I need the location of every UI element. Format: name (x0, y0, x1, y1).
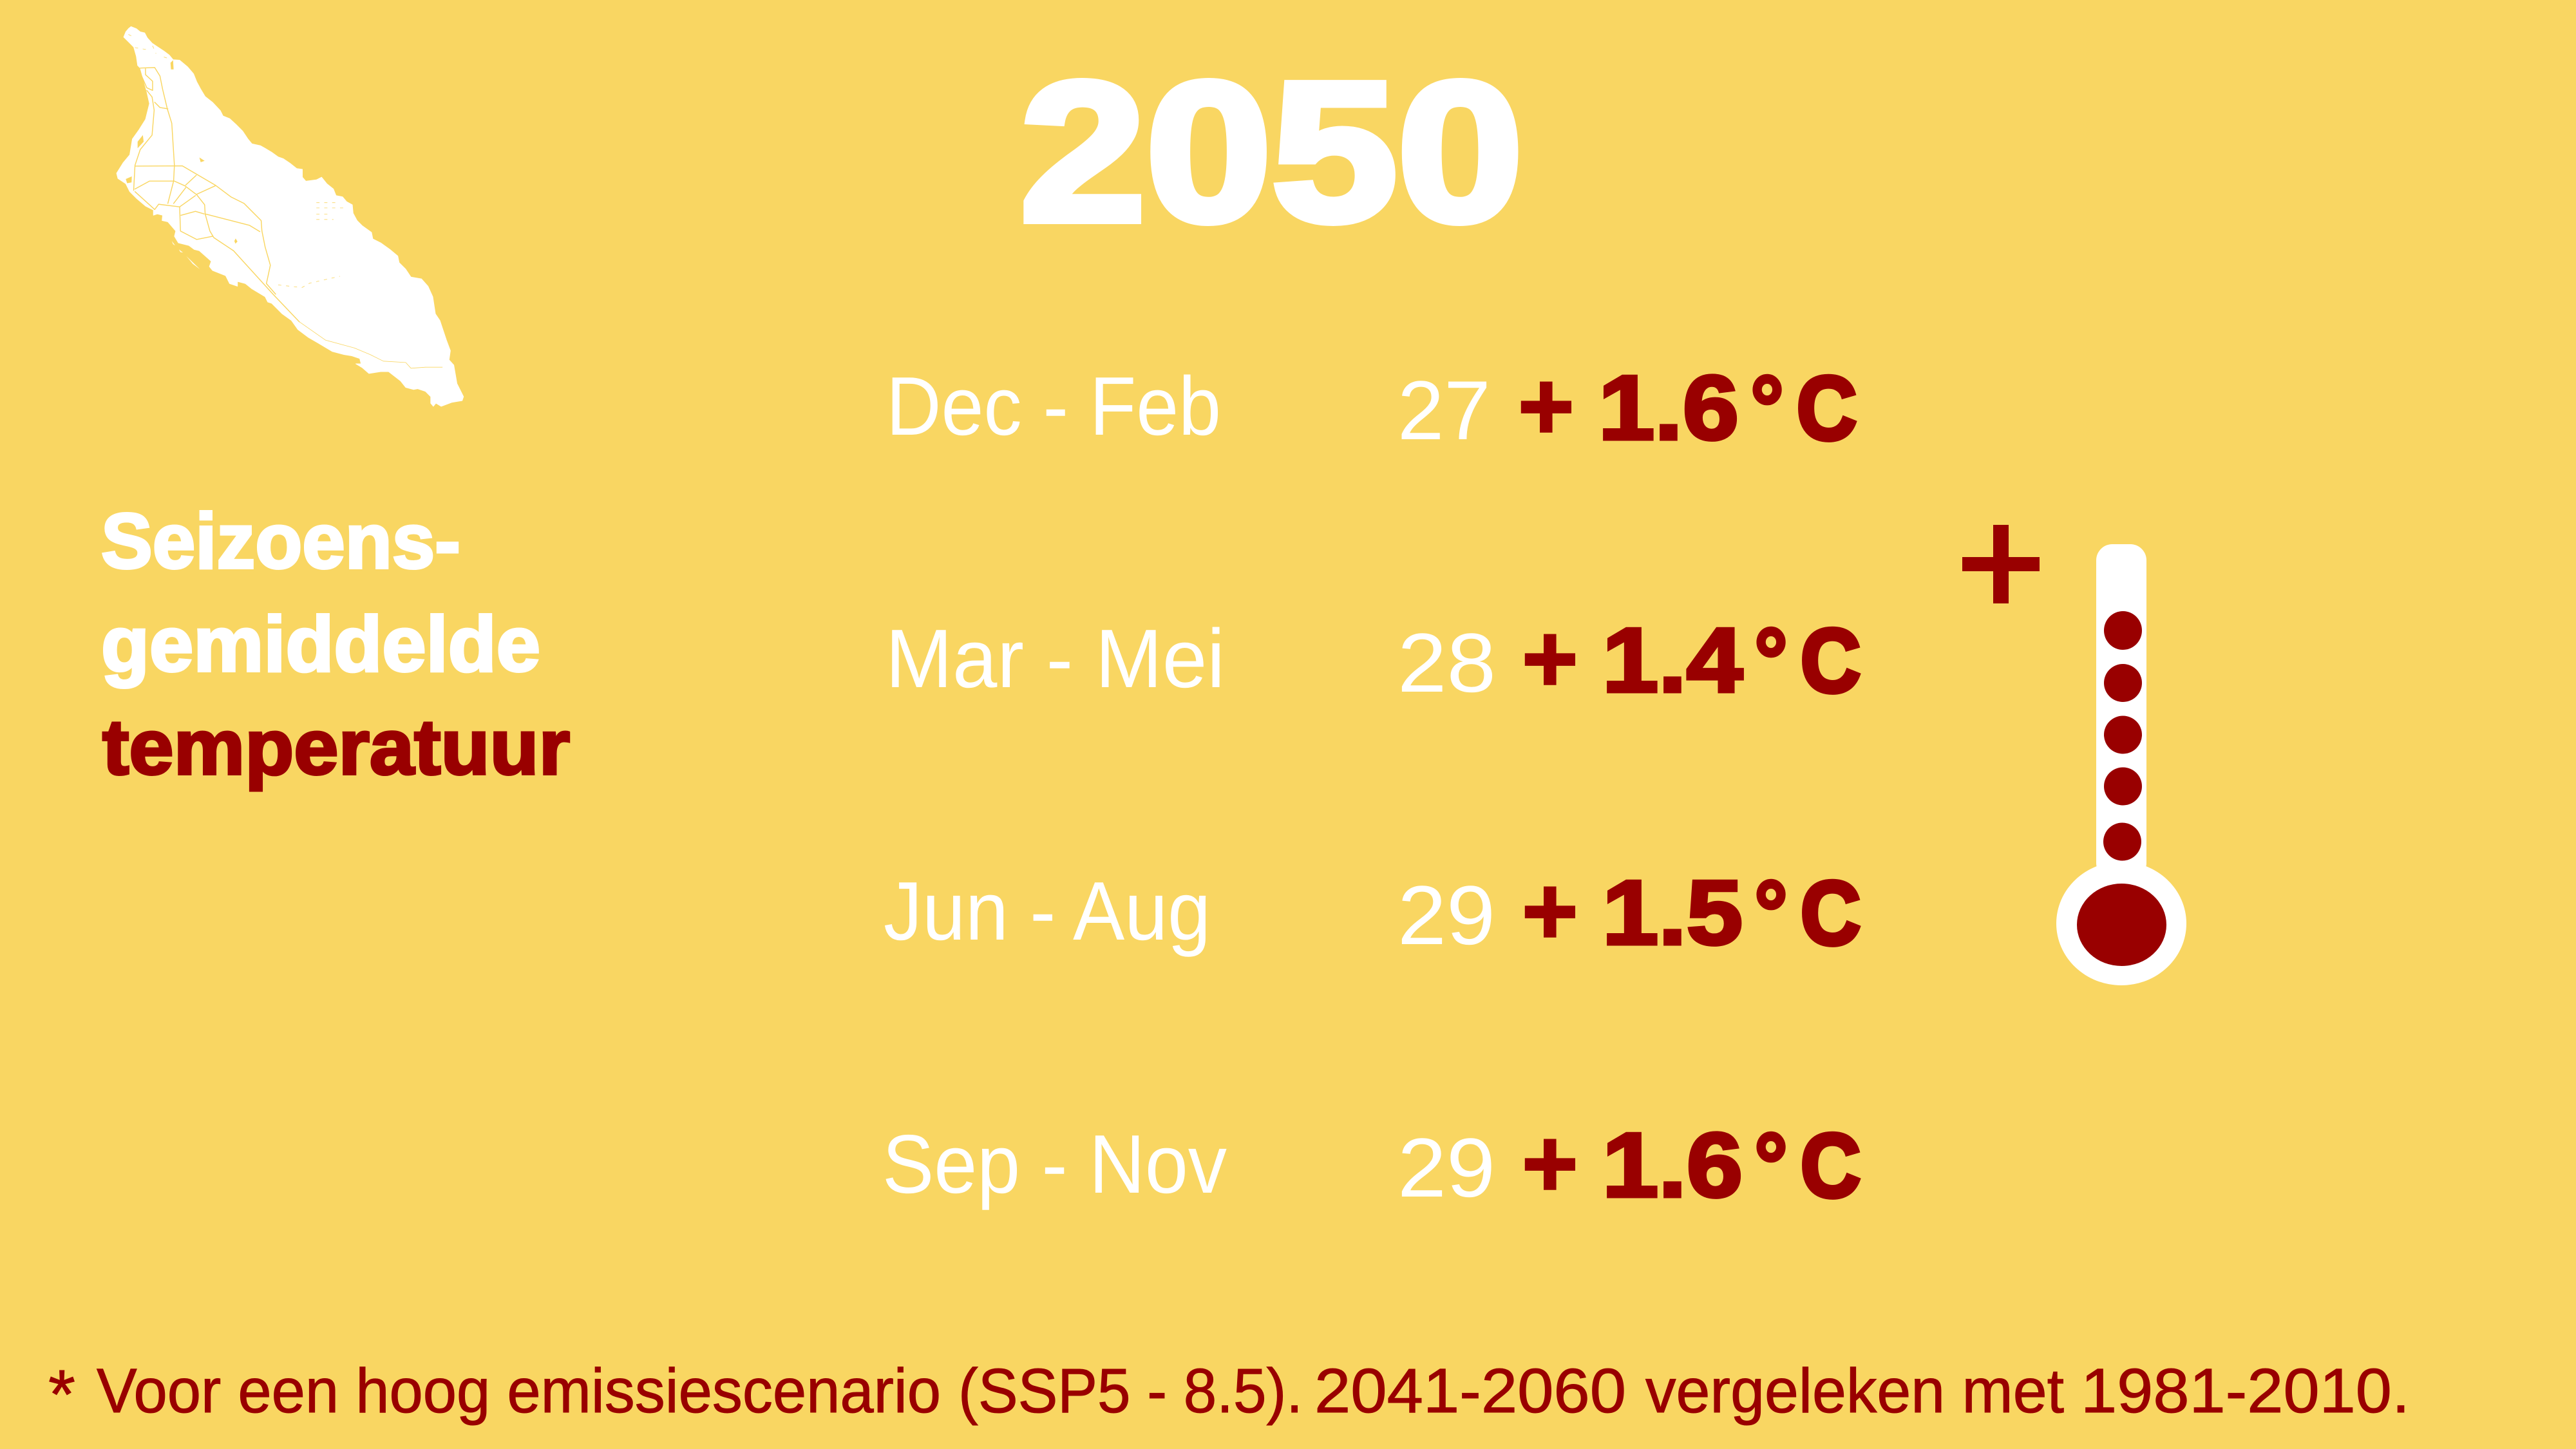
season label: Mar - Mei (886, 612, 1225, 705)
row: Jun - Aug (884, 857, 1861, 965)
plus sign: + (1522, 604, 1578, 712)
footnote: vergeleken met (1645, 1356, 2064, 1426)
heading line 3: temperatuur (102, 703, 570, 791)
temperature increase (1598, 357, 1857, 459)
temperature increase: 1.4 (1602, 609, 1743, 712)
temperature increase: C (1797, 357, 1857, 459)
icon: plus sign (1962, 525, 2040, 603)
season label: Dec - Feb (886, 360, 1221, 453)
row: Dec - Feb (886, 352, 1857, 460)
plus sign: + (1522, 1109, 1578, 1217)
footnote: 1981-2010. (2081, 1356, 2410, 1426)
temperature increase: 1.5 (1602, 862, 1743, 964)
footnote: * (48, 1355, 75, 1433)
temperature increase: 1.6 (1602, 1114, 1743, 1217)
baseline temperature: 27 (1397, 363, 1491, 457)
icon: thermometer (2056, 544, 2186, 985)
footnote (48, 1355, 2410, 1433)
temperature increase: C (1801, 862, 1861, 963)
row: Mar - Mei (886, 604, 1861, 712)
row: Sep - Nov (882, 1109, 1861, 1217)
temperature increase (1602, 862, 1861, 964)
plus sign: + (1518, 352, 1575, 460)
footnote: 2041-2060 (1314, 1356, 1626, 1426)
heading line 2: gemiddelde (101, 600, 540, 688)
temperature increase: C (1801, 610, 1861, 711)
title: 2050: 2050 (1020, 41, 1523, 263)
baseline temperature: 29 (1397, 1121, 1495, 1215)
footnote: Voor een hoog emissiescenario (97, 1356, 941, 1426)
temperature increase: 1.6 (1598, 357, 1739, 459)
temperature increase: ° (1750, 357, 1784, 459)
footnote: (SSP5 - 8.5). (958, 1356, 1303, 1426)
heading: Seizoensgemiddelde temperatuur (101, 497, 570, 791)
baseline temperature: 29 (1397, 868, 1495, 962)
season label: Sep - Nov (882, 1118, 1227, 1211)
temperature increase: C (1801, 1115, 1861, 1216)
icon: map of Aruba (117, 26, 464, 406)
temperature increase: ° (1754, 862, 1788, 964)
temperature increase (1602, 609, 1861, 712)
baseline temperature: 28 (1397, 616, 1496, 710)
temperature increase: ° (1754, 1114, 1788, 1217)
temperature increase: ° (1754, 609, 1788, 712)
plus sign: + (1522, 857, 1578, 965)
season label: Jun - Aug (884, 865, 1211, 958)
heading line 1: Seizoens- (101, 497, 460, 585)
temperature increase (1602, 1114, 1861, 1217)
